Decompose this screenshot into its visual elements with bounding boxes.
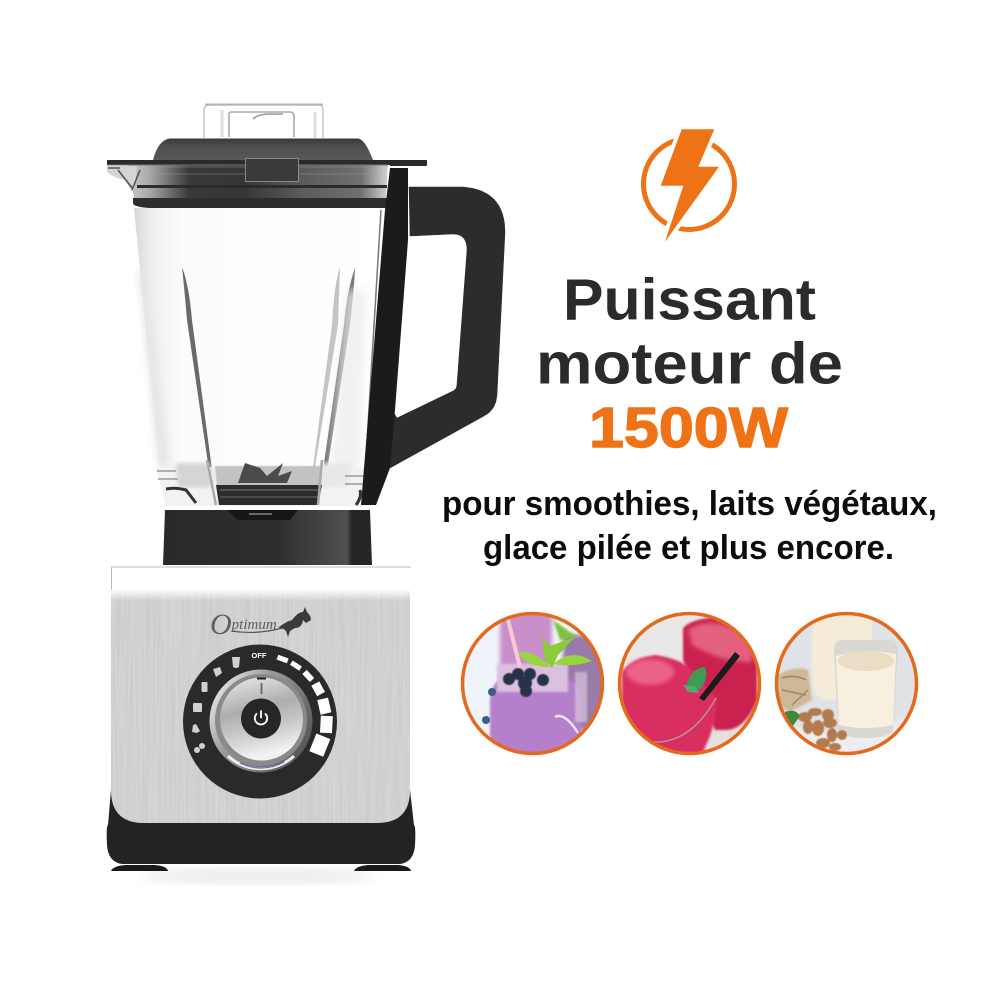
subheading: pour smoothies, laits végétaux, (442, 485, 937, 523)
blender illustration (107, 104, 505, 884)
control dial (183, 644, 337, 798)
silver knob ring (210, 670, 312, 772)
pour spout (107, 166, 137, 191)
lid knob (204, 104, 323, 138)
black base (107, 790, 415, 864)
brand logo: ptimum (231, 617, 277, 633)
jar bottom with blades (156, 460, 368, 506)
subheading (442, 485, 937, 567)
photo: almond milk (775, 610, 921, 760)
icon: power symbol (255, 711, 267, 724)
base feet (111, 865, 411, 871)
handle (384, 187, 505, 468)
heading: Puissant (563, 268, 816, 332)
steel panel (111, 566, 411, 824)
silver knob disc (220, 678, 303, 760)
heading (536, 268, 843, 460)
photo: blueberry smoothie (460, 610, 606, 760)
icon: lightning bolt in ring (644, 129, 734, 242)
heading: moteur de (536, 332, 843, 396)
motor collar (163, 510, 372, 565)
dial label OFF: OFF (252, 651, 267, 660)
jar glass body (134, 208, 383, 505)
lid rim (107, 160, 427, 166)
lower rim ring (133, 198, 387, 208)
jar handle strip (361, 168, 408, 505)
heading: 1500W (589, 396, 788, 460)
brand logo: O (210, 608, 232, 641)
icon: kangaroo (278, 607, 311, 637)
collar top detail (227, 510, 298, 520)
black ring line (137, 185, 387, 188)
jar rim band (107, 165, 388, 208)
brand logo (210, 607, 311, 641)
subheading: glace pilée et plus encore. (483, 529, 894, 567)
floor shadow (140, 868, 376, 884)
lid (153, 138, 373, 160)
speed segments (277, 655, 333, 757)
program icons (192, 657, 240, 753)
jar ribs (138, 210, 381, 477)
infographic canvas (106, 104, 935, 884)
photo: crushed ice slush (617, 610, 763, 760)
power button (241, 698, 281, 738)
lid lock block (246, 158, 298, 182)
